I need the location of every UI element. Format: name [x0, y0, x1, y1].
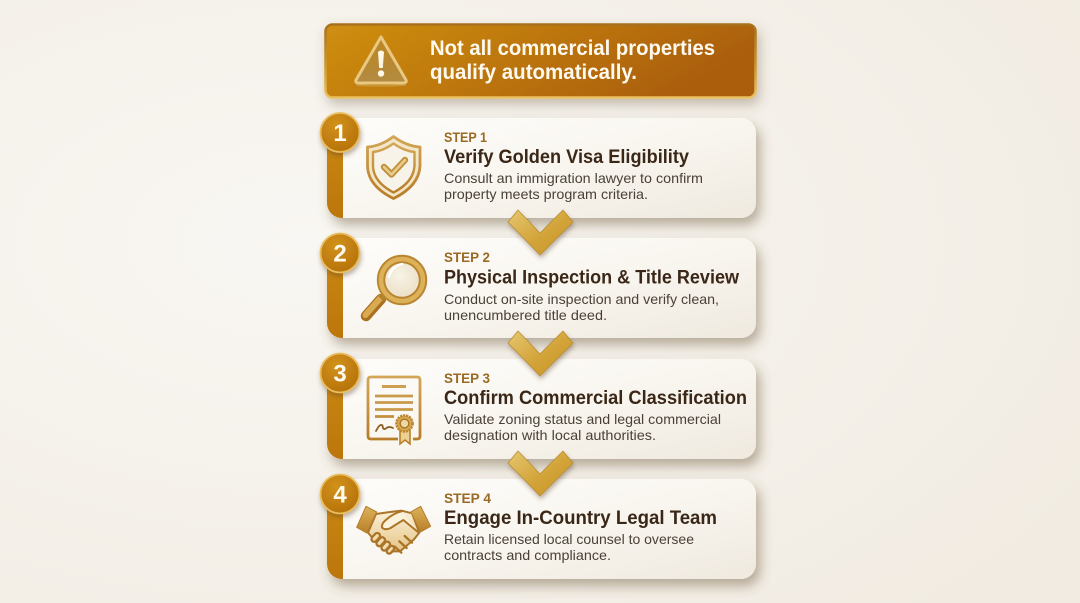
banner heading: Not all commercial properties: [430, 37, 715, 60]
banner heading: [430, 37, 715, 84]
card background: [327, 118, 756, 218]
warning banner: [326, 24, 756, 98]
connector chevron 1: [508, 210, 573, 255]
icon: shield with check: [368, 136, 420, 198]
step 2 description: [444, 292, 719, 323]
card background: [327, 479, 756, 579]
step 4 label: STEP 4: [444, 491, 491, 506]
accent bar: [327, 388, 343, 459]
banner heading: qualify automatically.: [430, 61, 637, 84]
icon: handshake: [357, 506, 431, 555]
step 2 title: Physical Inspection & Title Review: [444, 268, 739, 288]
icon: magnifying glass: [366, 259, 423, 316]
step 3 title: Confirm Commercial Classification: [444, 388, 747, 409]
step 4 title: Engage In-Country Legal Team: [444, 508, 717, 529]
panel: step 3: [320, 354, 756, 459]
accent bar: [327, 148, 343, 218]
panel: step 1: [320, 113, 756, 218]
step 3 description: [444, 412, 721, 443]
panel: step 2: [320, 234, 756, 338]
step 3 label: STEP 3: [444, 371, 490, 386]
step 2 description: Conduct on-site inspection and verify clean,: [444, 292, 719, 307]
step 2 label: STEP 2: [444, 250, 490, 265]
card background: [327, 238, 756, 338]
step 3 description: designation with local authorities.: [444, 428, 656, 443]
icon: certificate document: [368, 377, 420, 444]
number badge 2: 2: [333, 240, 347, 268]
panel: step 4: [320, 474, 756, 579]
number badge 3: 3: [333, 360, 347, 388]
step 4 description: Retain licensed local counsel to oversee: [444, 532, 694, 547]
number badge 1: [320, 113, 360, 152]
connector chevron 3: [508, 451, 573, 496]
step 2 description: unencumbered title deed.: [444, 308, 607, 323]
step 3 description: Validate zoning status and legal commercial: [444, 412, 721, 427]
accent bar: [327, 510, 343, 579]
step 1 title: Verify Golden Visa Eligibility: [444, 147, 689, 168]
step 1 description: Consult an immigration lawyer to confirm: [444, 171, 703, 186]
step 4 description: [444, 532, 694, 563]
number badge 1: 1: [333, 120, 347, 147]
number badge 3: [320, 354, 360, 392]
number badge 2: [320, 234, 360, 272]
connector chevron 2: [508, 331, 573, 376]
step 4 description: contracts and compliance.: [444, 548, 611, 563]
icon: warning triangle: [356, 37, 406, 86]
number badge 4: 4: [333, 482, 347, 508]
card background: [327, 359, 756, 459]
accent bar: [327, 268, 343, 338]
number badge 4: [320, 474, 360, 514]
step 1 description: [444, 171, 703, 202]
step 1 description: property meets program criteria.: [444, 187, 648, 202]
step 1 label: STEP 1: [444, 130, 487, 145]
